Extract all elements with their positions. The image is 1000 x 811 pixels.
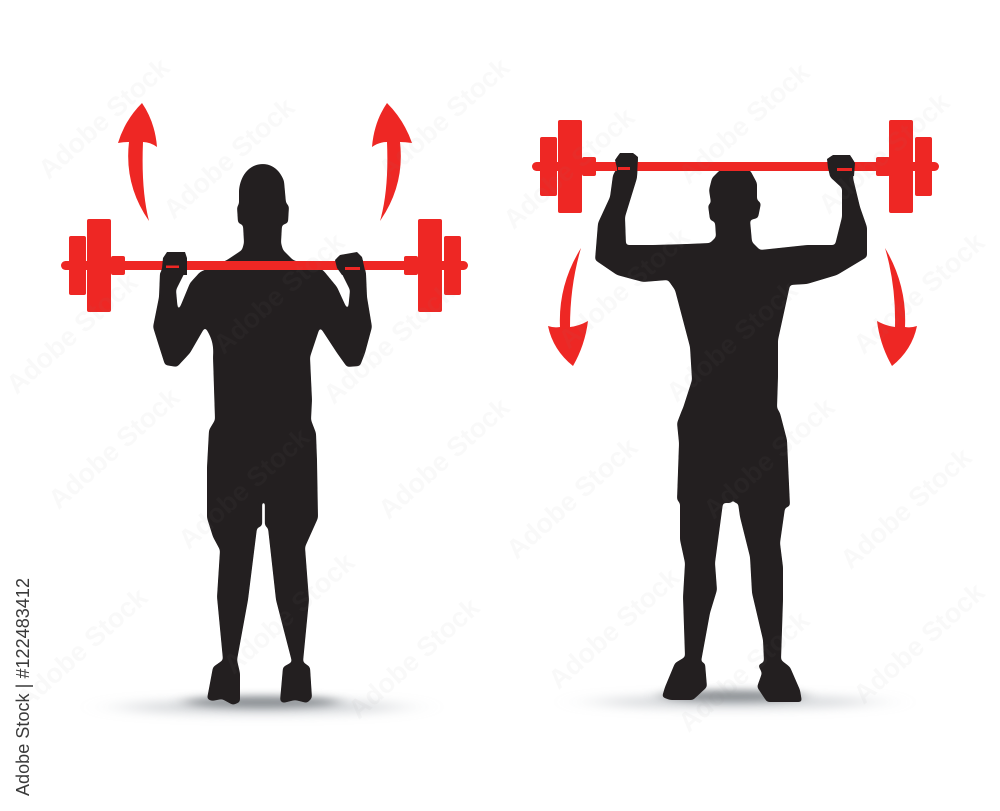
- arrow down: right side: [877, 248, 917, 366]
- watermark: repeated Adobe Stock text: Adobe Stock: [373, 51, 516, 185]
- barbell: right athlete: [532, 120, 939, 213]
- watermark: repeated Adobe Stock text: Adobe Stock: [43, 381, 186, 515]
- watermark: repeated Adobe Stock text: Adobe Stock: [673, 56, 816, 190]
- watermark: repeated Adobe Stock text: Adobe Stock: [498, 101, 641, 235]
- watermark: repeated Adobe Stock text: Adobe Stock: [218, 546, 361, 680]
- floor shadow: left athlete: [122, 696, 402, 715]
- watermark: repeated Adobe Stock text: Adobe Stock: [848, 576, 991, 710]
- arrow up: right side: [372, 103, 412, 221]
- watermark: repeated Adobe Stock text: Adobe Stock: [553, 221, 696, 355]
- watermark: repeated Adobe Stock text: Adobe Stock: [501, 431, 644, 565]
- watermark: repeated Adobe Stock text: Adobe Stock: [33, 51, 176, 185]
- watermark: repeated Adobe Stock text: Adobe Stock: [318, 276, 461, 410]
- silhouette: left athlete: [153, 164, 372, 705]
- watermark: repeated Adobe Stock text: Adobe Stock: [813, 86, 956, 220]
- watermark: repeated Adobe Stock text: Adobe Stock: [343, 591, 486, 725]
- watermark: repeated Adobe Stock text: Adobe Stock: [661, 274, 804, 408]
- watermark: repeated Adobe Stock text: Adobe Stock: [835, 441, 978, 575]
- watermark: repeated Adobe Stock text: Adobe Stock: [11, 581, 154, 715]
- floor shadow: right athlete: [595, 690, 875, 709]
- watermark: repeated Adobe Stock text: Adobe Stock: [173, 421, 316, 555]
- stock credit: Adobe Stock | #122483412: [13, 578, 33, 796]
- hands on bar: left athlete: [160, 252, 366, 275]
- arrow down: left side: [548, 248, 588, 366]
- watermark: repeated Adobe Stock text: Adobe Stock: [208, 226, 351, 360]
- watermark: repeated Adobe Stock text: Adobe Stock: [158, 91, 301, 225]
- watermark: repeated Adobe Stock text: Adobe Stock: [373, 391, 516, 525]
- hands on bar: right athlete: [615, 153, 855, 176]
- watermark: repeated Adobe Stock text: Adobe Stock: [698, 391, 841, 525]
- watermark: repeated Adobe Stock text: Adobe Stock: [1, 266, 144, 400]
- watermark: repeated Adobe Stock text: Adobe Stock: [543, 561, 686, 695]
- barbell: left athlete: [61, 219, 468, 312]
- watermark: repeated Adobe Stock text: Adobe Stock: [848, 226, 991, 360]
- arrow up: left side: [118, 103, 157, 221]
- watermark: repeated Adobe Stock text: Adobe Stock: [673, 604, 816, 738]
- silhouette: right athlete: [595, 153, 867, 702]
